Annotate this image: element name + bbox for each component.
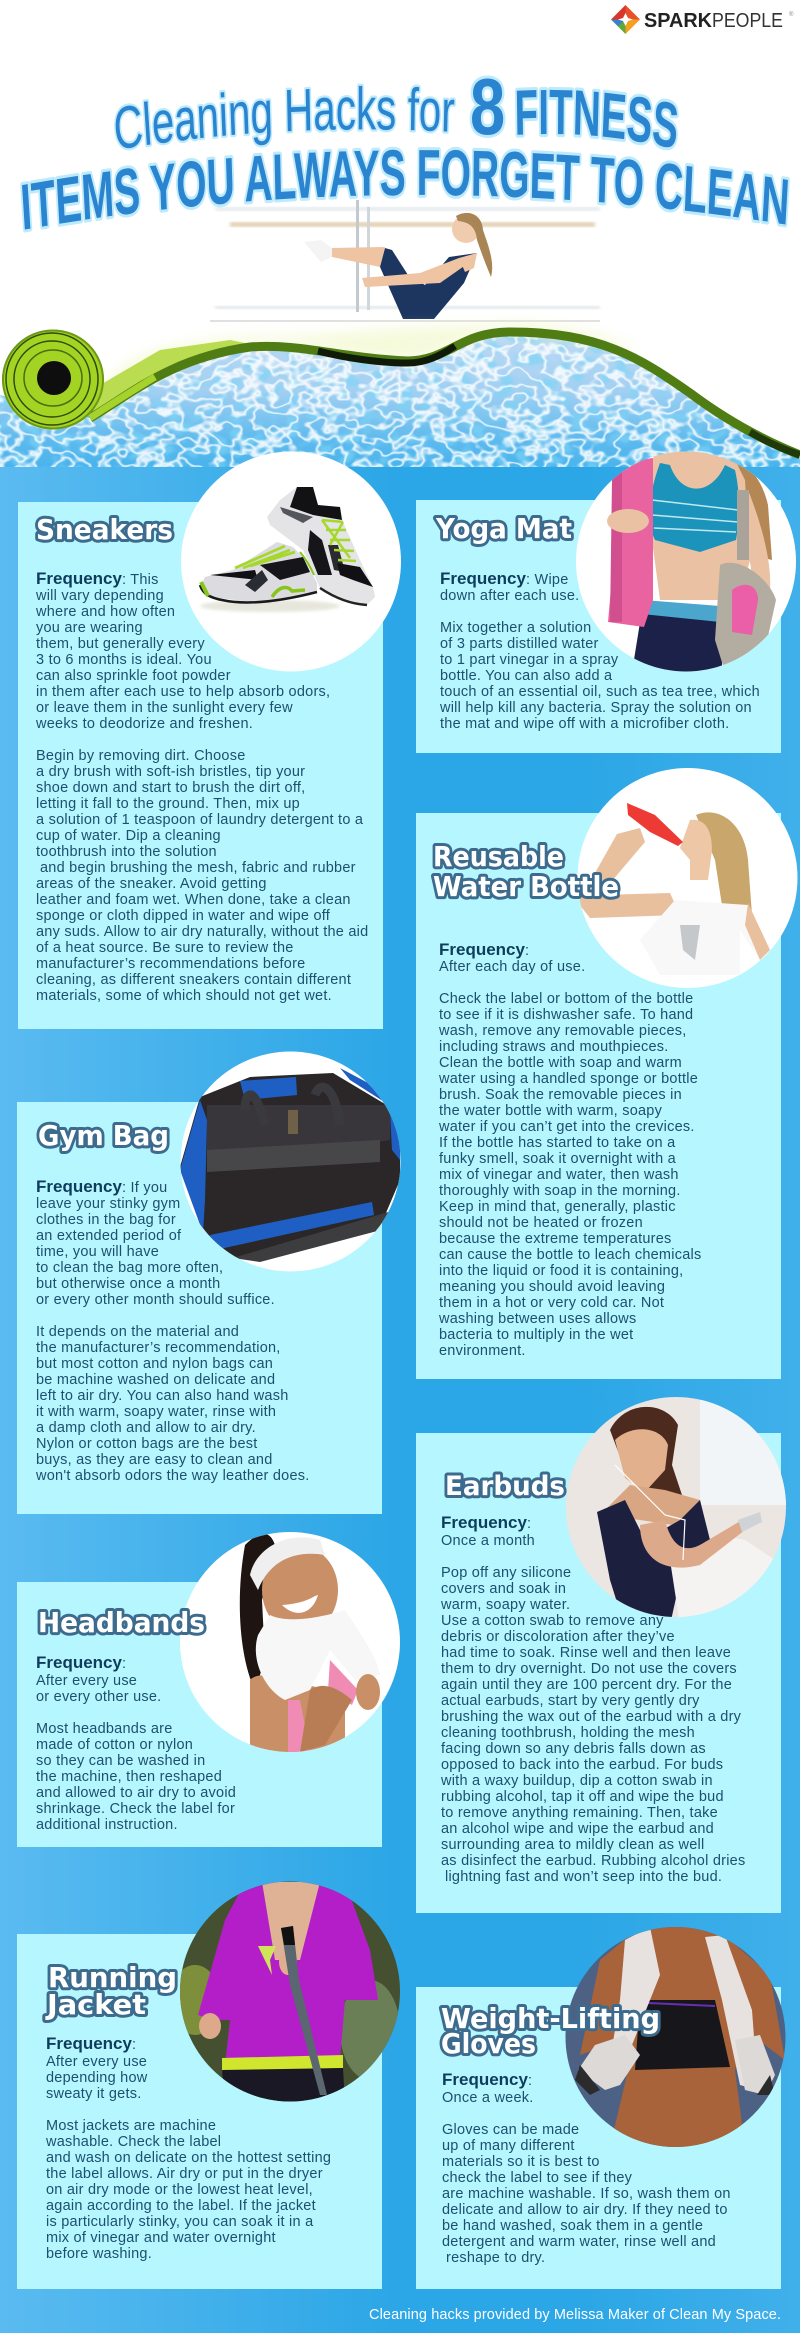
body text: Most jackets are machine (46, 2118, 216, 2134)
body text: can also sprinkle foot powder (36, 668, 231, 684)
body text: Keep in mind that, generally, plastic (439, 1199, 676, 1215)
body text: shoe down and start to brush the dirt off, (36, 780, 305, 796)
body text: left to air dry. You can also hand wash (36, 1388, 289, 1404)
body text: It depends on the material and (36, 1324, 239, 1340)
body text: Frequency (36, 1653, 123, 1672)
icon: woman with towel and gloves photo (566, 1927, 786, 2147)
panel: sneakers (18, 452, 401, 1029)
title line 1 thin: Cleaning Hacks for (114, 84, 456, 150)
body text: it with warm, soapy water, rinse with (36, 1404, 276, 1420)
body text: Frequency (36, 1177, 123, 1196)
body text: them, but generally every (36, 636, 205, 652)
panel: running jacket (17, 1882, 400, 2289)
body text: on air dry mode or the lowest heat level, (46, 2182, 313, 2198)
icon: woman with headband photo (180, 1532, 400, 1752)
body text: up of many different (442, 2138, 575, 2154)
body text: materials so it is best to (442, 2154, 600, 2170)
body text: sweaty it gets. (46, 2086, 141, 2102)
body text: them in a hot or very cold car. Not (439, 1295, 664, 1311)
body text: should not be heated or frozen (439, 1215, 643, 1231)
body text: After every use (36, 1673, 137, 1689)
body text: funky smell, soak it overnight with a (439, 1151, 677, 1167)
body text: After each day of use. (439, 959, 585, 975)
body text: Mix together a solution (440, 620, 591, 636)
body text: washable. Check the label (45, 2134, 221, 2150)
body text: the machine, then reshaped (36, 1769, 222, 1785)
body text: will vary depending (35, 588, 164, 604)
body text: or every other month should suffice. (36, 1292, 275, 1308)
body text: be machine washed on delicate and (36, 1372, 275, 1388)
body text: down after each use. (440, 588, 579, 604)
body text: any suds. Allow to air dry naturally, without the aid (36, 924, 368, 940)
body text: meaning you should avoid leaving (439, 1279, 665, 1295)
body text: surrounding area to mildly clean as well (441, 1837, 704, 1853)
body text: : (122, 1656, 126, 1672)
heading: Reusable (433, 840, 564, 873)
body text: mix of vinegar and water, then wash (439, 1167, 679, 1183)
body text: lightning fast and won’t seep into the bud. (445, 1869, 722, 1885)
body text: leave your stinky gym (36, 1196, 180, 1212)
body text: with a waxy buildup, dip a cotton swab in (440, 1773, 713, 1789)
body text: detergent and warm water, rinse well and (442, 2234, 716, 2250)
body text: as disinfect the earbud. Rubbing alcohol dries (441, 1853, 745, 1869)
body text: buys, as they are easy to clean and (36, 1452, 273, 1468)
body text: actual earbuds, start by very gently dry (441, 1693, 700, 1709)
icon: woman with earbuds photo (566, 1395, 790, 1625)
body text: can cause the bottle to leach chemicals (439, 1247, 701, 1263)
body text: the manufacturer’s recommendation, (36, 1340, 281, 1356)
heading: Earbuds (445, 1471, 565, 1502)
body text: the label allows. Air dry or put in the dryer (46, 2166, 323, 2182)
body text: you are wearing (36, 620, 143, 636)
body text: delicate and allow to air dry. If they need to (442, 2202, 728, 2218)
panel: earbuds (416, 1395, 790, 1913)
body text: but most cotton and nylon bags can (36, 1356, 273, 1372)
panel: weight-lifting gloves (416, 1927, 786, 2289)
body text: materials, some of which should not get wet. (36, 988, 332, 1004)
heading: Running (48, 1961, 177, 1994)
heading: Sneakers (36, 513, 173, 546)
body text: If the bottle has started to take on a (439, 1135, 676, 1151)
body text: of a heat source. Be sure to review the (36, 940, 294, 956)
body text: cup of water. Dip a cleaning (36, 828, 221, 844)
body text: Pop off any silicone (441, 1565, 571, 1581)
body text: environment. (439, 1343, 526, 1359)
body text: areas of the sneaker. Avoid getting (36, 876, 267, 892)
body text: Frequency (46, 2034, 133, 2053)
body text: be hand washed, soak them in a gentle (442, 2218, 703, 2234)
body text: After every use (46, 2054, 147, 2070)
title (20, 63, 790, 232)
body text: bacteria to multiply in the wet (439, 1327, 633, 1343)
body text: or leave them in the sunlight every few (36, 700, 293, 716)
heading (441, 2002, 660, 2060)
panel: reusable water bottle (416, 768, 798, 1379)
heading: Yoga Mat (435, 512, 572, 545)
body text: Frequency (441, 1513, 528, 1532)
body text: clothes in the bag for (36, 1212, 176, 1228)
body text: time, you will have (36, 1244, 159, 1260)
body text: made of cotton or nylon (36, 1737, 193, 1753)
icon: woman with yoga mat photo (576, 450, 796, 672)
body text: reshape to dry. (446, 2250, 545, 2266)
heading: Headbands (38, 1606, 205, 1639)
body text: into the liquid or food it is containing, (439, 1263, 683, 1279)
body text: won't absorb odors the way leather does. (35, 1468, 310, 1484)
body text: an extended period of (36, 1228, 182, 1244)
logo: SparkPeople: SPARK (644, 10, 713, 32)
panel: yoga mat (416, 450, 796, 753)
body text: : (528, 2073, 532, 2089)
body text: wash, remove any removable pieces, (438, 1023, 687, 1039)
body text: again according to the label. If the jacket (46, 2198, 316, 2214)
logo: SparkPeople (611, 5, 794, 34)
body text: to remove anything remaining. Then, take (441, 1805, 718, 1821)
body text: of 3 parts distilled water (440, 636, 599, 652)
icon: woman drinking from red bottle photo (578, 768, 798, 988)
body text: touch of an essential oil, such as tea tree, which (440, 684, 760, 700)
body text: again until they are 100 percent dry. For the (441, 1677, 732, 1693)
body text: to 1 part vinegar in a spray (440, 652, 619, 668)
heading (433, 840, 619, 903)
body text: thoroughly with soap in the morning. (439, 1183, 681, 1199)
title FITNESS: FITNESS (515, 86, 679, 150)
body text: sponge or cloth dipped in water and wipe off (36, 908, 331, 924)
heading: Gym Bag (38, 1119, 169, 1152)
body text: brush. Soak the removable pieces in (439, 1087, 682, 1103)
yoga mat wave and roll (2, 322, 800, 455)
body text: to see if it is dishwasher safe. To hand (439, 1007, 693, 1023)
logo: SparkPeople: ® (789, 11, 794, 18)
body text: toothbrush into the solution (36, 844, 217, 860)
body text: letting it fall to the ground. Then, mix up (36, 796, 300, 812)
icon: sneakers photo (181, 452, 401, 672)
body text: because the extreme temperatures (439, 1231, 672, 1247)
body text: : This (122, 572, 159, 588)
body text: to clean the bag more often, (36, 1260, 223, 1276)
body text: shrinkage. Check the label for (36, 1801, 235, 1817)
body text: the water bottle with warm, soapy (439, 1103, 663, 1119)
heading: Weight-Lifting (441, 2002, 660, 2035)
body text: will help kill any bacteria. Spray the solution on (439, 700, 752, 716)
body text: an alcohol wipe and wipe the earbud and (441, 1821, 714, 1837)
body text: Frequency (440, 569, 527, 588)
body text: the mat and wipe off with a microfiber cloth. (440, 716, 729, 732)
body text: cleaning toothbrush, holding the mesh (441, 1725, 695, 1741)
body text: weeks to deodorize and freshen. (35, 716, 253, 732)
body text: or every other use. (36, 1689, 161, 1705)
body text: are machine washable. If so, wash them on (442, 2186, 731, 2202)
heading: Water Bottle (433, 870, 619, 903)
body text: and allowed to air dry to avoid (36, 1785, 236, 1801)
wave of bubbles (0, 325, 800, 470)
body text: had time to soak. Rinse well and then leave (441, 1645, 731, 1661)
body text: bottle. You can also add a (440, 668, 613, 684)
body text: before washing. (46, 2246, 152, 2262)
body text: is particularly stinky, you can soak it in a (46, 2214, 314, 2230)
body text: Frequency (36, 569, 123, 588)
body text: : (527, 1516, 531, 1532)
body text: a damp cloth and allow to air dry. (36, 1420, 256, 1436)
body text: additional instruction. (36, 1817, 178, 1833)
body text: washing between uses allows (438, 1311, 637, 1327)
hero photo: woman in boat pose at barre (210, 200, 600, 322)
body text: them to dry overnight. Do not use the covers (441, 1661, 737, 1677)
icon: running jacket photo (170, 1882, 400, 2105)
body text: Use a cotton swab to remove any (441, 1613, 664, 1629)
body text: depending how (46, 2070, 148, 2086)
body text: rubbing alcohol, tap it off and wipe the bud (441, 1789, 724, 1805)
body text: and wash on delicate on the hottest setting (46, 2150, 331, 2166)
body text: covers and soak in (441, 1581, 566, 1597)
body text: but otherwise once a month (36, 1276, 220, 1292)
body text: leather and foam wet. When done, take a clean (36, 892, 351, 908)
body text: cleaning, as different sneakers contain different (36, 972, 351, 988)
body text: in them after each use to help absorb odors, (36, 684, 330, 700)
body text: Gloves can be made (442, 2122, 579, 2138)
body text: opposed to back into the earbud. For buds (441, 1757, 723, 1773)
body text: so they can be washed in (36, 1753, 205, 1769)
body text: Check the label or bottom of the bottle (439, 991, 693, 1007)
title line 2: ITEMS YOU ALWAYS FORGET TO CLEAN (20, 146, 790, 232)
body text: a dry brush with soft-ish bristles, tip your (36, 764, 305, 780)
body text: : (525, 943, 529, 959)
body text: including straws and mouthpieces. (439, 1039, 669, 1055)
body text: Once a month (441, 1533, 535, 1549)
icon: gym bag photo (180, 1052, 400, 1272)
body text: a solution of 1 teaspoon of laundry detergent to a (36, 812, 364, 828)
body text: debris or discoloration after they’ve (441, 1629, 675, 1645)
body text: mix of vinegar and water overnight (46, 2230, 276, 2246)
body text: brushing the wax out of the earbud with a dry (441, 1709, 742, 1725)
body text: check the label to see if they (442, 2170, 633, 2186)
body text: Frequency (442, 2070, 529, 2089)
body text: warm, soapy water. (440, 1597, 570, 1613)
logo: SparkPeople: PEOPLE (712, 10, 783, 32)
body text: Begin by removing dirt. Choose (36, 748, 246, 764)
body text: where and how often (35, 604, 175, 620)
body text: : (132, 2037, 136, 2053)
body text: Frequency (439, 940, 526, 959)
body text: water if you can’t get into the crevices. (438, 1119, 695, 1135)
body text: water using a handled sponge or bottle (438, 1071, 698, 1087)
body text: : Wipe (526, 572, 569, 588)
body text: Most headbands are (36, 1721, 173, 1737)
panel: gym bag (17, 1052, 400, 1514)
heading: Jacket (45, 1988, 146, 2021)
body text: facing down so any debris falls down as (441, 1741, 706, 1757)
body text: 3 to 6 months is ideal. You (36, 652, 212, 668)
heading: Gloves (441, 2027, 536, 2060)
body text: manufacturer’s recommendations before (36, 956, 305, 972)
body text: Clean the bottle with soap and warm (439, 1055, 682, 1071)
body text: and begin brushing the mesh, fabric and rubber (40, 860, 356, 876)
body text: : If you (122, 1180, 167, 1196)
heading (45, 1961, 177, 2021)
body text: Nylon or cotton bags are the best (36, 1436, 258, 1452)
footer credit: Cleaning hacks provided by Melissa Maker of Clean My Space. (369, 2307, 781, 2323)
body text: Once a week. (442, 2090, 534, 2106)
panel: headbands (17, 1532, 400, 1847)
title number 8: 8 (470, 63, 505, 152)
